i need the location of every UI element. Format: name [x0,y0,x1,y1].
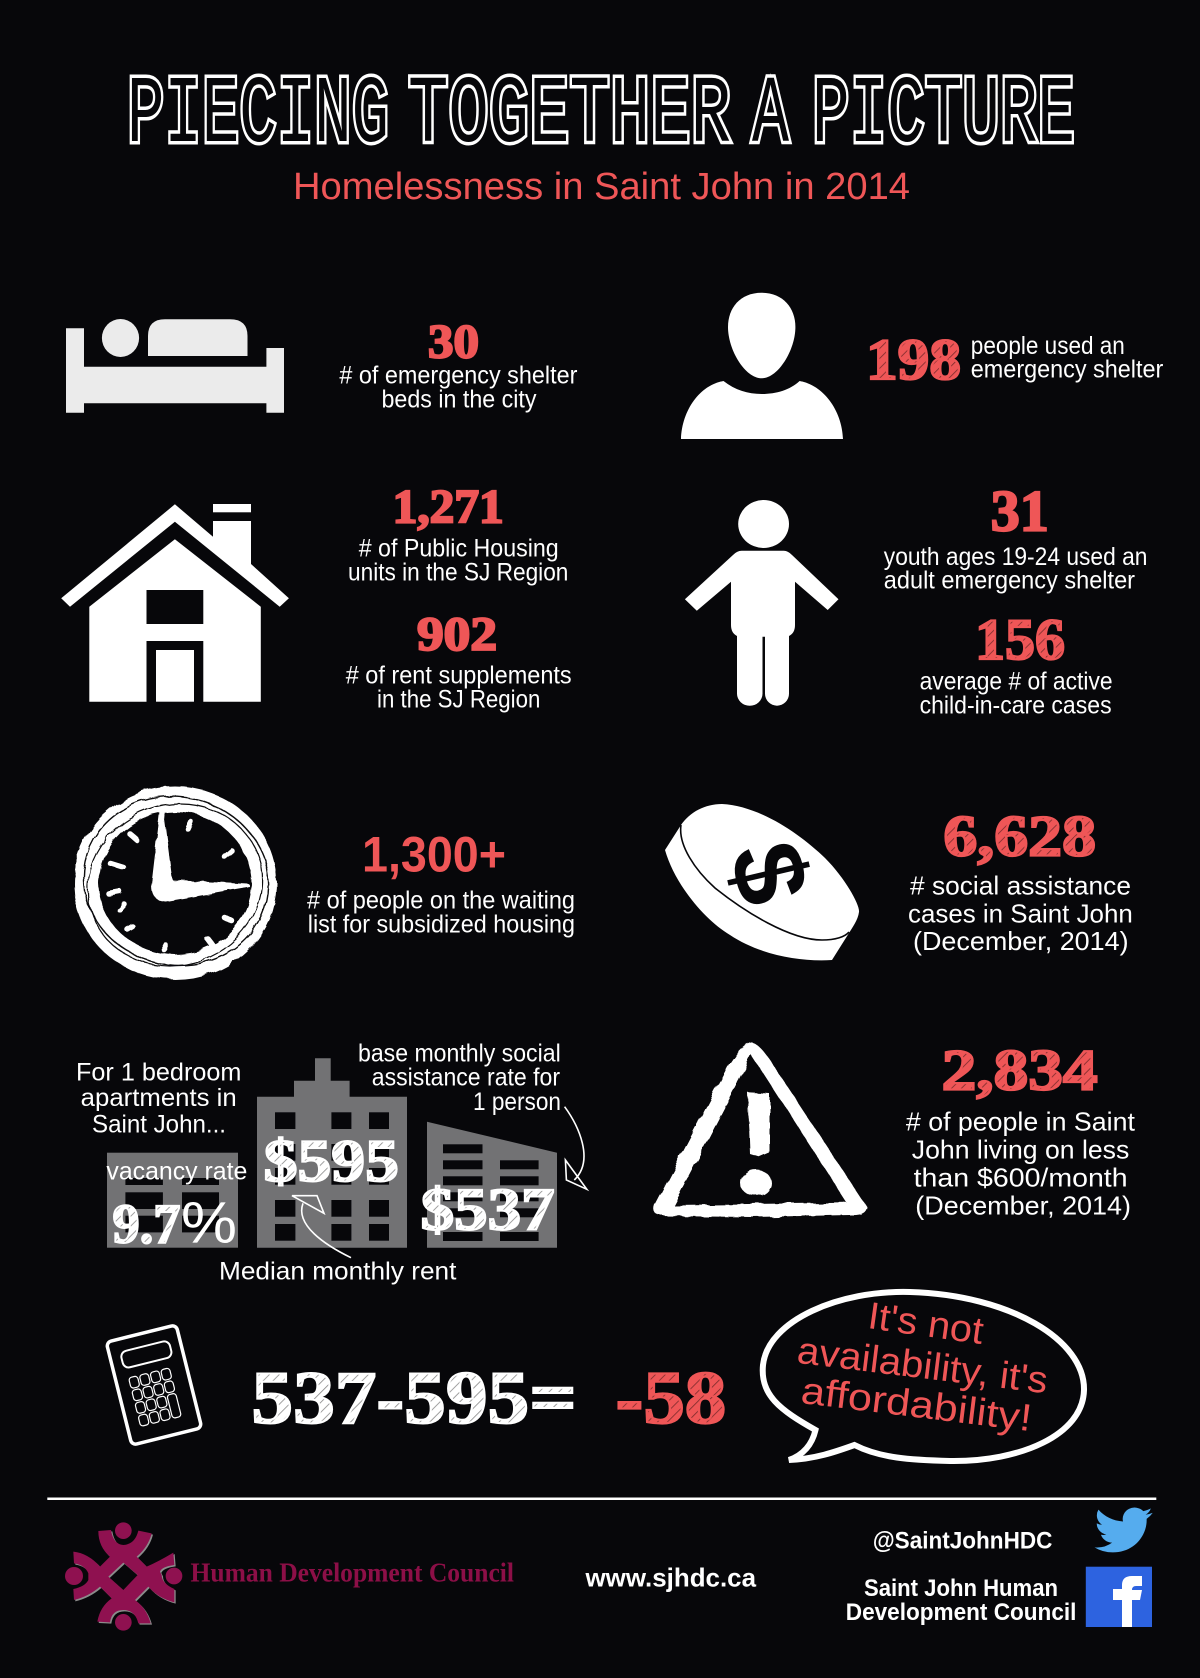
stat: $537: $537 [421,1176,555,1242]
label: rent supplements [346,661,572,713]
panel: youth and children [685,478,1148,719]
twitter handle: @SaintJohnHDC [873,1527,1052,1554]
label: public housing units [348,535,568,587]
callout: speech bubble [763,1292,1084,1461]
label: rent supplements: # of rent supplements [346,661,572,689]
label: people living on less than $600: (December, 2014) [915,1190,1131,1220]
label: child in care [920,667,1113,719]
label: youth in shelter: adult emergency shelter [884,566,1135,594]
stat: 1,271: 1,271 [393,480,504,534]
title [127,61,1075,170]
stat: 9.7%: 9.7 [112,1194,180,1256]
stat: 30: 30 [428,316,479,368]
stat: 156: 156 [975,607,1065,672]
facebook page name [846,1575,1076,1626]
icon: calculator [106,1325,202,1445]
stat: 1,300+: 1,300+ [362,827,506,883]
label: public housing units: units in the SJ Region [348,559,568,587]
label: base monthly social assistance rate: assistance rate for [372,1064,560,1092]
label: waiting list: # of people on the waiting [307,886,575,914]
panel: public housing and rent supplements [61,480,572,713]
label: waiting list: list for subsidized housing [308,911,575,939]
label: social assistance cases: # social assistance [910,870,1131,900]
icon: facebook logo [1086,1567,1152,1627]
panel: 1 bedroom apartments [76,1040,587,1285]
title: PIECING [127,61,389,170]
label: for 1 bedroom apartments [76,1059,241,1139]
label: people used shelter [971,332,1163,383]
icon: tall building [257,1058,407,1248]
label: people used shelter: people used an [971,332,1125,360]
label: people living on less than $600: John living on less [912,1134,1129,1164]
label: child in care: child-in-care cases [920,691,1112,719]
icon: person bust [681,293,843,439]
label: base monthly social assistance rate [358,1040,561,1116]
subtitle: Homelessness in Saint John in 2014 [293,166,910,208]
icon: council emblem [65,1522,182,1631]
icon: bed [66,319,284,413]
label: people living on less than $600 [906,1107,1136,1220]
icon: twitter bird [1094,1508,1153,1552]
stat: $595: $595 [264,1128,399,1194]
callout: speech bubble: affordability! [799,1370,1034,1440]
title: A [752,61,789,170]
icon: dollar coin [665,804,859,960]
title: TOGETHER [408,61,731,170]
logo wordmark: Human Development Council [190,1558,514,1588]
label: vacancy rate: vacancy rate [106,1157,247,1185]
facebook page name: Development Council [846,1599,1076,1626]
icon: warning triangle [654,1042,867,1217]
icon: dollar coin: $ [707,832,831,915]
facebook page name: Saint John Human [864,1575,1058,1602]
label: median monthly rent: Median monthly rent [219,1257,456,1285]
icon: sketched clock [65,779,285,990]
label: social assistance cases: cases in Saint John [908,898,1133,928]
panel: affordability equation [106,1292,1084,1461]
label: youth in shelter [884,543,1148,594]
label: people used shelter: emergency shelter [971,355,1163,383]
icon: slanted building [427,1122,557,1248]
icon: small building [107,1153,238,1248]
label: child in care: average # of active [920,667,1113,695]
footer divider [47,1498,1156,1500]
callout: speech bubble: It's not [865,1295,986,1353]
equation result: -58: -58 [616,1357,726,1440]
website: www.sjhdc.ca [585,1563,757,1593]
label: people living on less than $600: than $600/month [914,1163,1128,1193]
panel: emergency shelter beds [66,316,577,413]
label: shelter beds [339,361,577,413]
icon: child figure [685,500,838,706]
label: people living on less than $600: # of people in Saint [906,1107,1136,1137]
panel: housing waiting list [65,779,575,990]
stat: 2,834: 2,834 [942,1038,1098,1102]
label: for 1 bedroom apartments: For 1 bedroom [76,1059,241,1087]
stat: 198: 198 [866,327,961,392]
panel: social assistance cases [665,804,1133,960]
stat: 9.7%: % [181,1190,237,1256]
stat: 9.7% [112,1190,237,1256]
arrow: to $595 [292,1196,351,1258]
stat: 902: 902 [417,608,497,661]
label: waiting list [307,886,575,939]
stat: 31: 31 [991,478,1049,544]
label: base monthly social assistance rate: base monthly social [358,1040,561,1068]
stat: 6,628: 6,628 [943,804,1096,868]
icon: house [61,504,289,702]
panel: living on less than $600 [654,1038,1136,1220]
equation: 537-595=: 537-595= [251,1357,577,1440]
logo: Human Development Council [65,1522,514,1631]
label: shelter beds: # of emergency shelter [339,361,577,389]
label: for 1 bedroom apartments: Saint John... [92,1111,226,1139]
arrow: to $537 [565,1107,587,1189]
label: base monthly social assistance rate: 1 person [473,1088,561,1116]
label: social assistance cases [908,870,1133,956]
label: for 1 bedroom apartments: apartments in [81,1084,237,1112]
label: shelter beds: beds in the city [382,385,537,413]
panel: people using shelter [681,293,1163,439]
callout: speech bubble: availability, it's [795,1330,1050,1402]
label: rent supplements: in the SJ Region [377,685,540,713]
label: public housing units: # of Public Housing [359,535,559,563]
label: youth in shelter: youth ages 19-24 used an [884,543,1148,571]
label: social assistance cases: (December, 2014) [913,926,1129,956]
